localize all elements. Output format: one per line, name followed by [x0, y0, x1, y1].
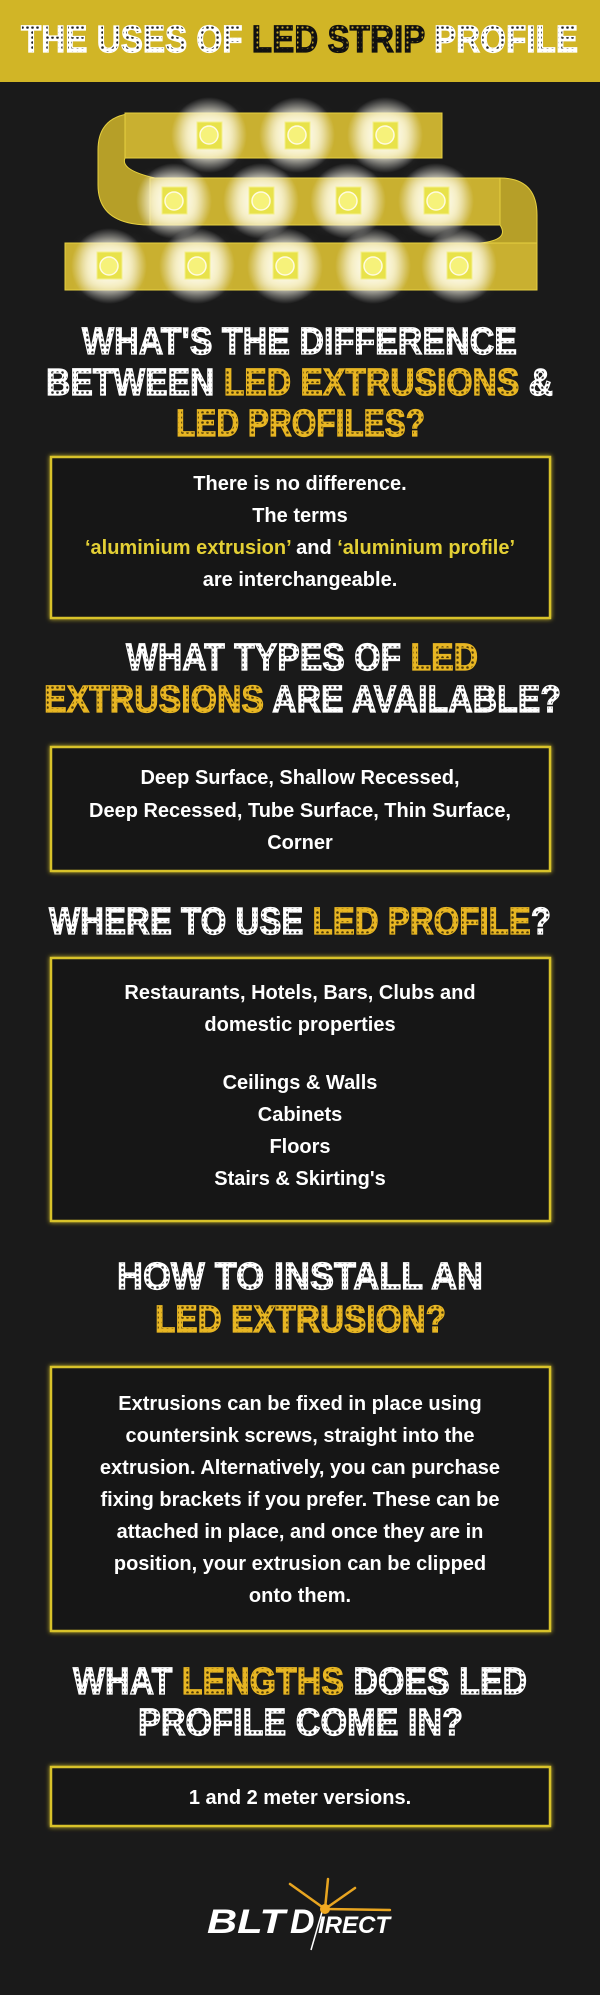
box: types: Deep Recessed, Tube Surface, Thin Surface,	[89, 800, 511, 822]
heading: install: LED EXTRUSION?	[155, 1299, 446, 1341]
logo: BLT Direct	[207, 1879, 392, 1950]
heading: lengths: PROFILE COME IN?	[138, 1702, 463, 1744]
box: types: Deep Surface, Shallow Recessed,	[140, 767, 460, 789]
box: difference answer: There is no difference.	[193, 473, 407, 495]
box: where	[51, 958, 550, 1221]
heading: difference: LED PROFILES?	[176, 403, 425, 445]
box: lengths: 1 and 2 meter versions.	[189, 1787, 411, 1809]
box: install	[51, 1367, 550, 1631]
box: install: countersink screws, straight into the	[126, 1425, 474, 1447]
heading: types: EXTRUSIONS ARE AVAILABLE?	[44, 679, 561, 721]
box: difference answer	[51, 457, 550, 618]
box: difference answer: The terms	[252, 505, 348, 527]
heading: types	[44, 637, 561, 721]
box: install: onto them.	[249, 1585, 351, 1607]
heading: lengths: WHAT LENGTHS DOES LED	[73, 1661, 527, 1703]
logo: BLT Direct: BLT	[207, 1903, 289, 1941]
box: where: domestic properties	[204, 1014, 396, 1036]
box: where: Restaurants, Hotels, Bars, Clubs and	[124, 982, 476, 1004]
box: install: extrusion. Alternatively, you can purchase	[100, 1457, 500, 1479]
box: install: attached in place, and once they are in	[117, 1521, 483, 1543]
heading: install	[117, 1256, 483, 1341]
title: THE USES OF LED STRIP PROFILE	[21, 19, 578, 61]
box: where: Ceilings & Walls	[223, 1072, 377, 1094]
box: where: Floors	[269, 1136, 331, 1158]
box: where: Cabinets	[258, 1104, 342, 1126]
box: install: Extrusions can be fixed in place using	[118, 1393, 482, 1415]
heading: where: WHERE TO USE LED PROFILE?	[49, 901, 551, 943]
heading: types: WHAT TYPES OF LED	[126, 637, 478, 679]
logo: BLT Direct: D	[290, 1903, 315, 1941]
box: types	[51, 747, 550, 871]
box: lengths	[51, 1767, 550, 1826]
box: where: Stairs & Skirting's	[214, 1168, 386, 1190]
heading: lengths	[73, 1661, 527, 1744]
box: types: Corner	[267, 832, 333, 854]
logo: BLT Direct: IRECT	[318, 1912, 392, 1939]
illustration: LED strip	[65, 97, 537, 304]
box: difference answer: ‘aluminium extrusion’ and ‘aluminium profile’	[85, 537, 515, 559]
heading: difference: BETWEEN LED EXTRUSIONS &	[46, 362, 553, 404]
box: install: fixing brackets if you prefer. These can be	[100, 1489, 500, 1511]
heading: difference: WHAT'S THE DIFFERENCE	[82, 321, 517, 363]
header band	[0, 0, 600, 82]
heading: difference	[46, 321, 553, 445]
heading: install: HOW TO INSTALL AN	[117, 1256, 483, 1298]
box: install: position, your extrusion can be clipped	[114, 1553, 486, 1575]
box: difference answer: are interchangeable.	[203, 569, 397, 591]
